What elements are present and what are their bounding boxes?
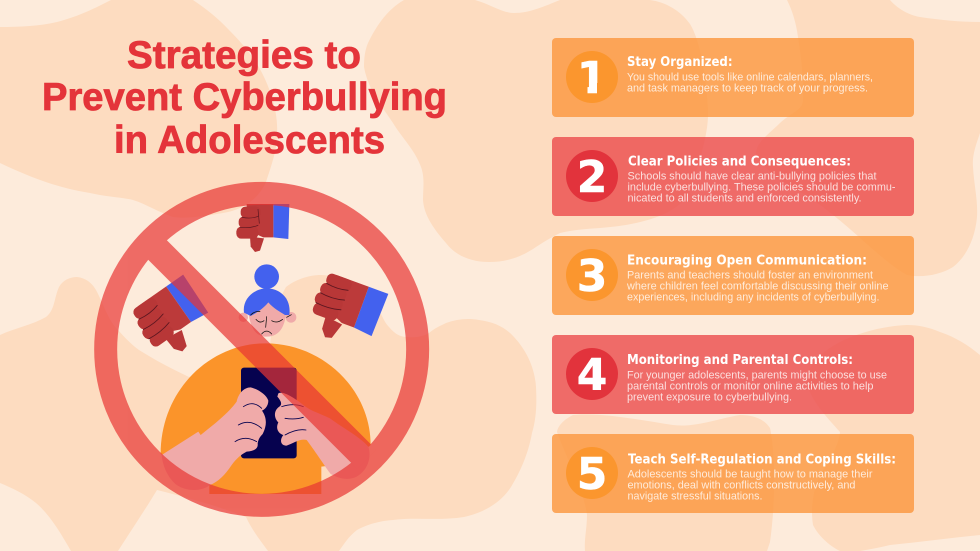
body 2: Schools should have clear anti-bullying policies that: [628, 171, 876, 183]
title: [42, 34, 447, 162]
icon: prohibition ring and slash: [106, 193, 418, 505]
body 5: emotions, deal with conflicts constructively, and: [628, 479, 856, 491]
badge 4: [566, 348, 618, 400]
badge 1: [566, 51, 618, 103]
icon: thumbs down right: [303, 271, 388, 353]
heading 5: Teach Self-Regulation and Coping Skills:: [628, 451, 896, 467]
icon: orange body: [161, 343, 371, 494]
card 5 background: [552, 434, 914, 513]
badge 3: [566, 249, 618, 301]
card 4 background: [552, 335, 914, 414]
body 5: Adolescents should be taught how to manage their: [628, 468, 873, 480]
number 5: 5: [577, 449, 607, 500]
icon: thumbs down top: [236, 204, 289, 252]
body 4: prevent exposure to cyberbullying.: [627, 391, 792, 403]
number 4: 4: [577, 350, 607, 401]
body 4: [627, 369, 887, 403]
body 3: where children feel comfortable discussing their online: [626, 281, 888, 293]
title: Strategies to: [127, 34, 361, 77]
illustration: adolescent on phone under prohibition sign: [106, 193, 418, 505]
icon: phone: [241, 368, 297, 458]
body 4: For younger adolescents, parents might choose to use: [627, 369, 887, 381]
body 5: [628, 468, 873, 502]
body 1: and task managers to keep track of your progress.: [627, 82, 868, 94]
body 3: experiences, including any incidents of cyberbullying.: [627, 292, 880, 304]
panel: card 1: [552, 38, 914, 117]
number 3: 3: [577, 251, 607, 302]
panel: card 4: [552, 335, 914, 414]
title: Prevent Cyberbullying: [42, 76, 447, 119]
body 2: [628, 171, 896, 205]
number 2: 2: [577, 152, 607, 203]
heading 1: Stay Organized:: [627, 54, 732, 70]
body 1: You should use tools like online calendars, planners,: [627, 72, 873, 84]
icon: right hand holding phone: [275, 393, 370, 479]
badge 5: [566, 447, 618, 499]
body 3: [626, 270, 888, 304]
panel: card 3: [552, 236, 914, 315]
icon: head with hair bun: [239, 264, 296, 337]
panel: card 5: [552, 434, 914, 513]
card 3 background: [552, 236, 914, 315]
number 1: 1: [577, 53, 607, 104]
body 2: include cyberbullying. These policies should be commu-: [628, 182, 896, 194]
card 2 background: [552, 137, 914, 216]
body 3: Parents and teachers should foster an environment: [627, 270, 873, 282]
card 1 background: [552, 38, 914, 117]
heading 2: Clear Policies and Consequences:: [628, 153, 851, 169]
icon: left hand holding phone: [162, 387, 268, 490]
body 1: [627, 72, 873, 94]
badge 2: [566, 150, 618, 202]
body 5: navigate stressful situations.: [628, 490, 762, 502]
title: in Adolescents: [114, 119, 385, 162]
panel: card 2: [552, 137, 914, 216]
heading 3: Encouraging Open Communication:: [627, 252, 867, 268]
body 4: parental controls or monitor online activities to help: [627, 380, 874, 392]
heading 4: Monitoring and Parental Controls:: [627, 352, 853, 368]
icon: thumbs down left: [128, 275, 219, 364]
body 2: nicated to all students and enforced consistently.: [628, 193, 862, 205]
